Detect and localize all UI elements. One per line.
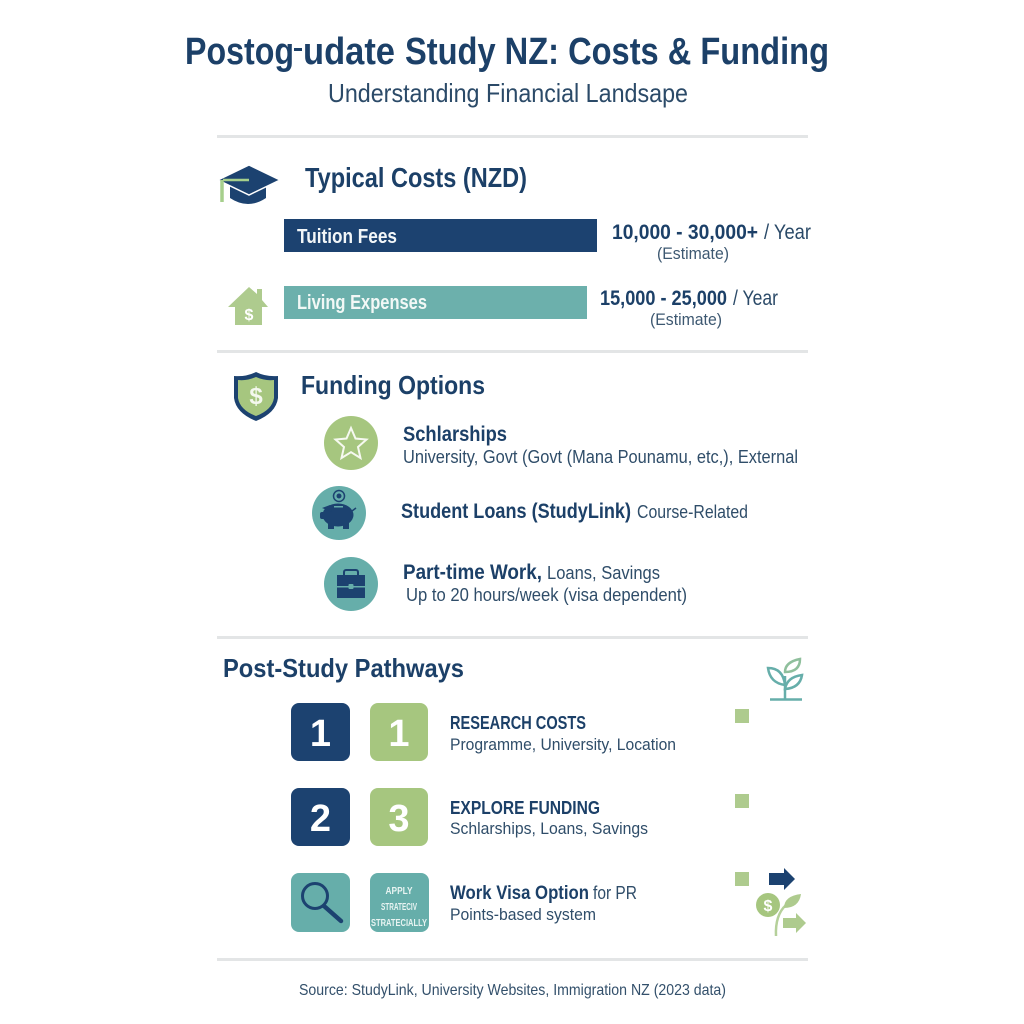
- icon: shield with dollar: [234, 372, 278, 421]
- title: [185, 31, 829, 73]
- text: explore funding: [450, 798, 648, 838]
- heading: funding options: Funding Options: [301, 370, 485, 400]
- title: Study NZ: Costs & Funding: [405, 31, 829, 73]
- icon: graduation cap: [218, 165, 280, 204]
- source note: Source: StudyLink, University Websites, Immigration NZ (2023 data): [299, 982, 726, 999]
- panel: post-study pathways: [223, 653, 806, 936]
- tile: green 1: [370, 703, 428, 761]
- panel: typical costs: [218, 162, 811, 329]
- icon: house with dollar: [228, 287, 268, 325]
- value: living expenses: 15,000 - 25,000: [600, 287, 727, 310]
- text: research costs: RESEARCH COSTS: [450, 713, 586, 733]
- value: living expenses: (Estimate): [650, 310, 722, 329]
- icon: dollar and sprout with arrow: [756, 893, 806, 936]
- text: part-time work: Part-time Work,: [403, 561, 542, 584]
- text: work visa option: Points-based system: [450, 905, 596, 924]
- text: explore funding: Schlarships, Loans, Savings: [450, 819, 648, 838]
- bar: living expenses: [284, 286, 587, 319]
- icon: star circle: [324, 416, 378, 470]
- text: part-time work: Up to 20 hours/week (visa dependent): [406, 585, 687, 605]
- text: work visa option: for PR: [593, 883, 637, 903]
- value: tuition fees: [612, 221, 811, 263]
- bar: living expenses: Living Expenses: [297, 292, 427, 314]
- tile: navy 1: 1: [310, 713, 331, 755]
- subtitle: Understanding Financial Landsape: [328, 78, 688, 108]
- text: student loans: Student Loans (StudyLink): [401, 500, 631, 523]
- title: udate: [303, 31, 395, 73]
- heading: post-study pathways: Post-Study Pathways: [223, 653, 464, 683]
- text: work visa option: Work Visa Option: [450, 883, 589, 904]
- text: scholarships: [403, 423, 798, 467]
- icon: navy arrow: [769, 868, 795, 890]
- text: explore funding: EXPLORE FUNDING: [450, 798, 600, 818]
- icon: house with dollar: $: [245, 307, 254, 324]
- tile: magnifier: [291, 873, 350, 932]
- tile: apply strategically: [370, 873, 429, 932]
- value: living expenses: / Year: [733, 287, 778, 310]
- title: Postog: [185, 31, 294, 73]
- text: scholarships: University, Govt (Govt (Mana Pounamu, etc,), External: [403, 447, 798, 467]
- text: part-time work: [403, 561, 687, 605]
- icon: shield with dollar: $: [249, 383, 263, 410]
- value: living expenses: [600, 287, 778, 329]
- text: work visa option: [450, 883, 637, 924]
- icon: dollar and sprout with arrow: $: [764, 898, 773, 915]
- text: research costs: Programme, University, Location: [450, 735, 676, 754]
- bar: tuition fees: [284, 219, 597, 252]
- tile: apply strategically: APPLY: [386, 886, 413, 897]
- text: student loans: Course-Related: [637, 502, 748, 522]
- tile: green 1: 1: [388, 713, 410, 755]
- bar: tuition fees: Tuition Fees: [297, 226, 397, 248]
- icon: piggy bank circle: [312, 486, 366, 540]
- text: research costs: [450, 713, 676, 754]
- panel: funding options: [234, 370, 798, 611]
- tile: navy 1: [291, 703, 350, 761]
- text: part-time work: Loans, Savings: [547, 563, 660, 583]
- icon: plant: [768, 659, 802, 700]
- tile: navy 2: [291, 788, 350, 846]
- heading: typical costs: Typical Costs (NZD): [305, 162, 527, 193]
- value: tuition fees: 10,000 - 30,000+: [612, 221, 758, 244]
- tile: green 3: 3: [388, 798, 410, 840]
- marker: square 1: [735, 709, 749, 723]
- text: scholarships: Schlarships: [403, 423, 507, 446]
- value: tuition fees: (Estimate): [657, 244, 729, 263]
- tile: apply strategically: STRATECIALLY: [371, 918, 427, 929]
- tile: apply strategically: STRATECIV: [381, 902, 417, 913]
- marker: square 2: [735, 794, 749, 808]
- tile: navy 2: 2: [310, 798, 331, 840]
- marker: square 3: [735, 872, 749, 886]
- icon: briefcase circle: [324, 557, 378, 611]
- value: tuition fees: / Year: [764, 221, 811, 244]
- tile: green 3: [370, 788, 428, 846]
